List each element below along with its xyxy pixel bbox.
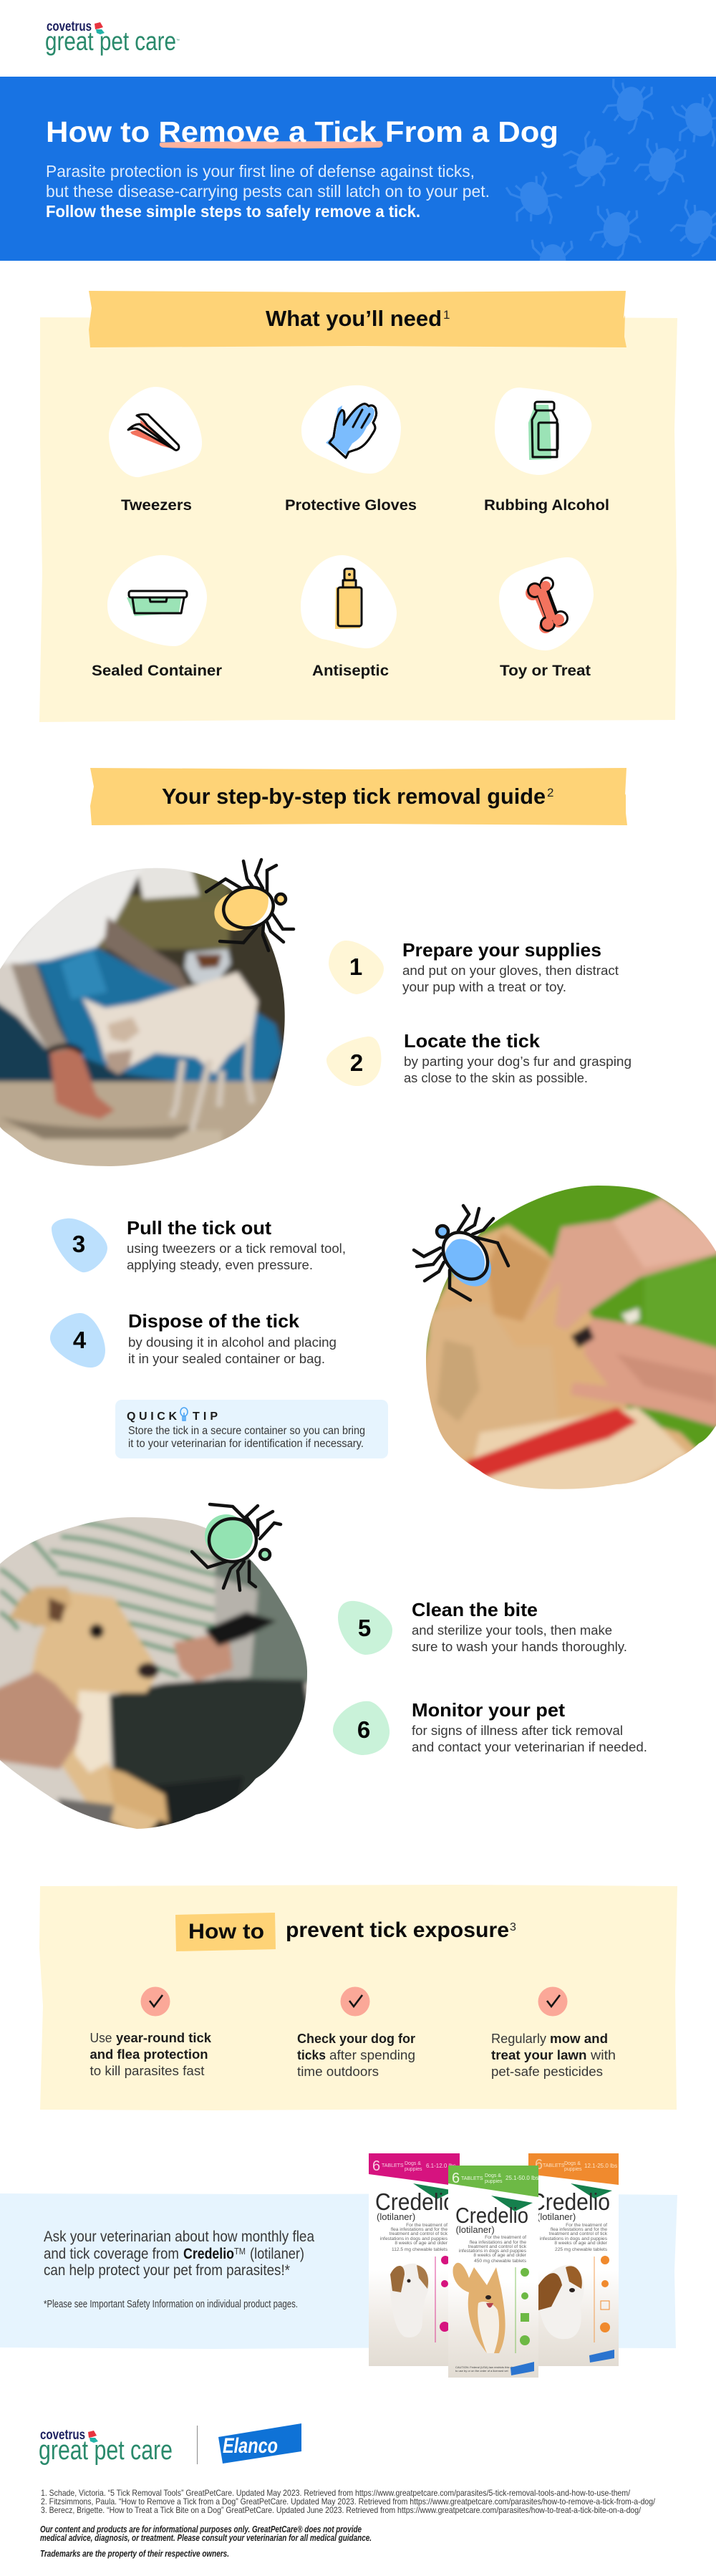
callout: quick tip	[115, 1400, 388, 1458]
references	[41, 2488, 656, 2515]
heading: how to prevent tick exposure	[175, 1913, 516, 1951]
callout: quick tip: it to your veterinarian for identification if necessary.	[128, 1438, 364, 1450]
step 2: as close to the skin as possible.	[404, 1070, 588, 1085]
callout: quick tip: QUICK	[127, 1410, 177, 1423]
logo: Covetrus Great Pet Care	[39, 2428, 173, 2466]
panel: what you'll need	[39, 291, 677, 722]
step 1: Prepare your supplies	[402, 939, 601, 961]
product box: green: treatment and control of tick	[468, 2244, 527, 2249]
step 6: 6	[357, 1716, 370, 1743]
tip: year-round protection	[90, 1987, 212, 2078]
heading: how to prevent tick exposure: 3	[510, 1921, 516, 1933]
product box: green: Credelio	[455, 2203, 528, 2228]
step 5	[338, 1599, 627, 1655]
product box: pink: 8 weeks of age and older	[395, 2241, 448, 2246]
title: How to Remove a Tick From a Dog	[46, 115, 558, 148]
step 5: 5	[358, 1615, 371, 1641]
product box: pink: Credelio	[375, 2188, 455, 2215]
step 2	[326, 1030, 632, 1086]
tip: year-round protection: to kill parasites fast	[90, 2063, 205, 2078]
top logo: Covetrus Great Pet Care: great pet care	[45, 27, 176, 56]
safety note: *Please see Important Safety Information on individual product pages.	[44, 2299, 298, 2310]
product box: orange: 225 mg chewable tablets	[555, 2247, 608, 2252]
step 1: and put on your gloves, then distract	[402, 963, 619, 978]
item: rubbing alcohol: Rubbing Alcohol	[484, 497, 609, 514]
decorative tick silhouettes	[505, 79, 716, 261]
product box: pink	[369, 2153, 460, 2366]
references: 3. Berecz, Brigette. “How to Treat a Tick Bite on a Dog” GreatPetCare. Updated June 2023. Retrieved from https://www.greatpetcare.com/parasites/how-to-treat-a-tick-bite-on-a-dog/	[41, 2505, 642, 2515]
intro text: Parasite protection is your first line of defense against ticks,	[46, 162, 475, 181]
step 1: your pup with a treat or toy.	[402, 979, 566, 994]
product box: orange	[528, 2153, 619, 2366]
step 4: by dousing it in alcohol and placing	[128, 1335, 337, 1350]
panel: how to prevent tick exposure	[39, 1885, 677, 2110]
promo text: (lotilaner)	[250, 2245, 304, 2262]
promo text: can help protect your pet from parasites!*	[44, 2262, 291, 2279]
product box: pink: 6.1-12.0 lbs	[426, 2163, 456, 2169]
disclaimer	[40, 2524, 372, 2559]
step 3: Pull the tick out	[127, 1217, 271, 1239]
product box: pink: treatment and control of tick	[390, 2231, 448, 2236]
product box: pink: For the treatment of	[406, 2223, 448, 2228]
heading ribbon: step-by-step guide: 2	[547, 786, 553, 799]
product box: orange: treatment and control of tick	[549, 2231, 608, 2236]
product box: pink: puppies	[405, 2167, 422, 2172]
step 5: sure to wash your hands thoroughly.	[412, 1639, 627, 1654]
promo text: and tick coverage from	[44, 2245, 179, 2262]
item: toy or treat	[499, 557, 594, 679]
item: protective gloves: Protective Gloves	[285, 497, 417, 514]
step 3	[52, 1217, 346, 1272]
product box: green: For the treatment of	[485, 2235, 526, 2240]
item: protective gloves	[285, 385, 417, 514]
logo: Elanco	[218, 2423, 301, 2464]
product box: green: TABLETS	[461, 2176, 483, 2181]
logo: Covetrus Great Pet Care: great pet care	[39, 2436, 173, 2466]
item: tweezers	[109, 387, 202, 514]
step 4: 4	[73, 1327, 87, 1353]
heading: how to prevent tick exposure: prevent tick exposure	[286, 1918, 509, 1942]
step 4: it in your sealed container or bag.	[128, 1351, 325, 1366]
heading ribbon: what you'll need: What you’ll need	[266, 306, 442, 331]
tip: mow and treat lawn: Regularly	[491, 2031, 547, 2046]
product box: green: to use by or on the order of a licensed vet	[455, 2369, 508, 2373]
references: 1. Schade, Victoria. “5 Tick Removal Tools” GreatPetCare. Updated May 2023. Retrieved from https://www.greatpetcare.com/parasites/5-tick-removal-tools-and-how-to-use-them/	[41, 2488, 631, 2498]
icon: light bulb	[180, 1408, 188, 1421]
tip: mow and treat lawn: mow and	[550, 2031, 608, 2046]
step 6	[333, 1699, 647, 1755]
logo: Covetrus Great Pet Care: covetrus	[40, 2428, 85, 2443]
callout: quick tip: Store the tick in a secure container so you can bring	[128, 1425, 365, 1437]
promo text: Ask your veterinarian about how monthly flea	[44, 2228, 314, 2245]
item: antiseptic	[301, 555, 397, 679]
step 1	[329, 939, 619, 994]
step 4: Dispose of the tick	[128, 1310, 300, 1332]
callout: quick tip: TIP	[193, 1410, 218, 1423]
product box: pink: TABLETS	[382, 2163, 404, 2168]
tip: year-round protection: year-round tick	[116, 2030, 212, 2045]
intro text	[46, 162, 490, 221]
product box: green: Dogs &	[485, 2173, 501, 2178]
tick illustration: green	[192, 1504, 281, 1590]
step 6: Monitor your pet	[412, 1699, 565, 1721]
tip: check your dog: ticks	[297, 2047, 326, 2062]
tip: year-round protection: Use	[90, 2030, 112, 2045]
step 3: applying steady, even pressure.	[127, 1257, 313, 1272]
product box: orange: flea infestations and for the	[551, 2227, 607, 2232]
top logo: Covetrus Great Pet Care	[45, 19, 180, 56]
tip: check your dog: after spending	[329, 2047, 415, 2062]
promo text	[44, 2228, 314, 2279]
heading ribbon: what you'll need	[89, 291, 626, 347]
heading: how to prevent tick exposure: How to	[188, 1920, 264, 1943]
intro text: Follow these simple steps to safely remove a tick.	[46, 202, 420, 221]
promo text: TM	[234, 2246, 246, 2257]
title underline	[160, 141, 383, 149]
tip: check your dog: Check your dog for	[297, 2031, 415, 2046]
step 2: Locate the tick	[404, 1030, 541, 1052]
step 5: Clean the bite	[412, 1599, 538, 1620]
tick illustration: yellow	[206, 860, 294, 951]
product box: orange: TABLETS	[543, 2163, 565, 2168]
product box: green: (lotilaner)	[455, 2224, 495, 2235]
step 3: 3	[72, 1231, 85, 1257]
step 3: using tweezers or a tick removal tool,	[127, 1241, 346, 1256]
photo: woman giving a treat to a small white dog	[0, 860, 301, 1175]
tip: year-round protection: and flea protection	[90, 2047, 208, 2062]
product box: green: 8 weeks of age and older	[473, 2253, 527, 2258]
product box: green: CAUTION: Federal (USA) law restricts this drug	[455, 2365, 516, 2369]
tip: check your dog	[297, 1987, 415, 2079]
step 2: 2	[350, 1049, 363, 1076]
top logo: Covetrus Great Pet Care: covetrus	[47, 19, 92, 34]
item: sealed container	[92, 555, 222, 679]
product box: orange: 12.1-25.0 lbs	[584, 2163, 617, 2169]
step 6: and contact your veterinarian if needed.	[412, 1739, 647, 1754]
product box: green: 25.1-50.0 lbs	[505, 2175, 538, 2181]
hero banner	[0, 77, 716, 279]
step 6: for signs of illness after tick removal	[412, 1723, 623, 1738]
product box: orange: Dogs &	[564, 2161, 581, 2166]
photo: person holding a tan puppy on the couch	[0, 1504, 319, 1837]
photo: hands parting a golden dog's fur	[414, 1178, 716, 1501]
disclaimer: Trademarks are the property of their respective owners.	[40, 2549, 229, 2559]
product box: pink: flea infestations and for the	[391, 2227, 448, 2232]
item: sealed container: Sealed Container	[92, 663, 222, 679]
product box: green: 450 mg chewable tablets	[474, 2259, 527, 2264]
product box: orange: puppies	[564, 2167, 582, 2172]
tick illustration: blue	[414, 1206, 508, 1300]
product box: orange: (lotilaner)	[537, 2211, 576, 2222]
product box: pink: Dogs &	[405, 2161, 421, 2166]
step 1: 1	[349, 953, 362, 980]
disclaimer: medical advice, diagnosis, or treatment. Please consult your veterinarian for all medical guidance.	[40, 2533, 372, 2543]
product box: green: flea infestations and for the	[470, 2240, 526, 2245]
product box: orange: 8 weeks of age and older	[554, 2241, 608, 2246]
heading ribbon: what you'll need: 1	[443, 308, 450, 322]
product box: pink: infestations in dogs and puppies	[380, 2236, 448, 2241]
tip: check your dog: time outdoors	[297, 2064, 379, 2079]
tip: mow and treat lawn	[491, 1987, 616, 2079]
tip: mow and treat lawn: pet-safe pesticides	[491, 2064, 603, 2079]
item: tweezers: Tweezers	[121, 497, 192, 514]
product box: green: 6	[452, 2171, 460, 2186]
step 5: and sterilize your tools, then make	[412, 1623, 612, 1638]
panel: Credelio promotion	[0, 2153, 677, 2378]
product box: orange: infestations in dogs and puppies	[540, 2236, 608, 2241]
footer logos	[39, 2423, 301, 2466]
intro text: but these disease-carrying pests can still latch on to your pet.	[46, 182, 490, 201]
tip: mow and treat lawn: treat your lawn	[491, 2047, 587, 2062]
product box: green: puppies	[485, 2179, 503, 2184]
product box: green: infestations in dogs and puppies	[459, 2249, 527, 2254]
step 4	[50, 1310, 337, 1368]
product box: green	[448, 2166, 538, 2378]
item: antiseptic: Antiseptic	[312, 663, 389, 679]
promo text: Credelio	[183, 2245, 234, 2262]
heading ribbon: step-by-step guide: Your step-by-step tick removal guide	[162, 784, 546, 809]
disclaimer: Our content and products are for informational purposes only. GreatPetCare® does not provide	[40, 2524, 362, 2534]
heading ribbon: step-by-step guide	[90, 768, 627, 825]
item: toy or treat: Toy or Treat	[500, 663, 591, 679]
tip: mow and treat lawn: with	[590, 2047, 616, 2062]
product box: pink: 6	[372, 2158, 380, 2174]
product box: pink: (lotilaner)	[377, 2211, 415, 2222]
logo: Elanco: Elanco	[223, 2434, 278, 2458]
item: rubbing alcohol	[484, 388, 609, 514]
product box: pink: 112.5 mg chewable tablets	[392, 2247, 448, 2252]
product box: orange: Credelio	[530, 2188, 610, 2215]
product box: orange: 6	[535, 2157, 543, 2173]
step 2: by parting your dog’s fur and grasping	[404, 1054, 632, 1069]
top logo: Covetrus Great Pet Care: ™	[176, 39, 180, 43]
product box: orange: For the treatment of	[566, 2223, 607, 2228]
